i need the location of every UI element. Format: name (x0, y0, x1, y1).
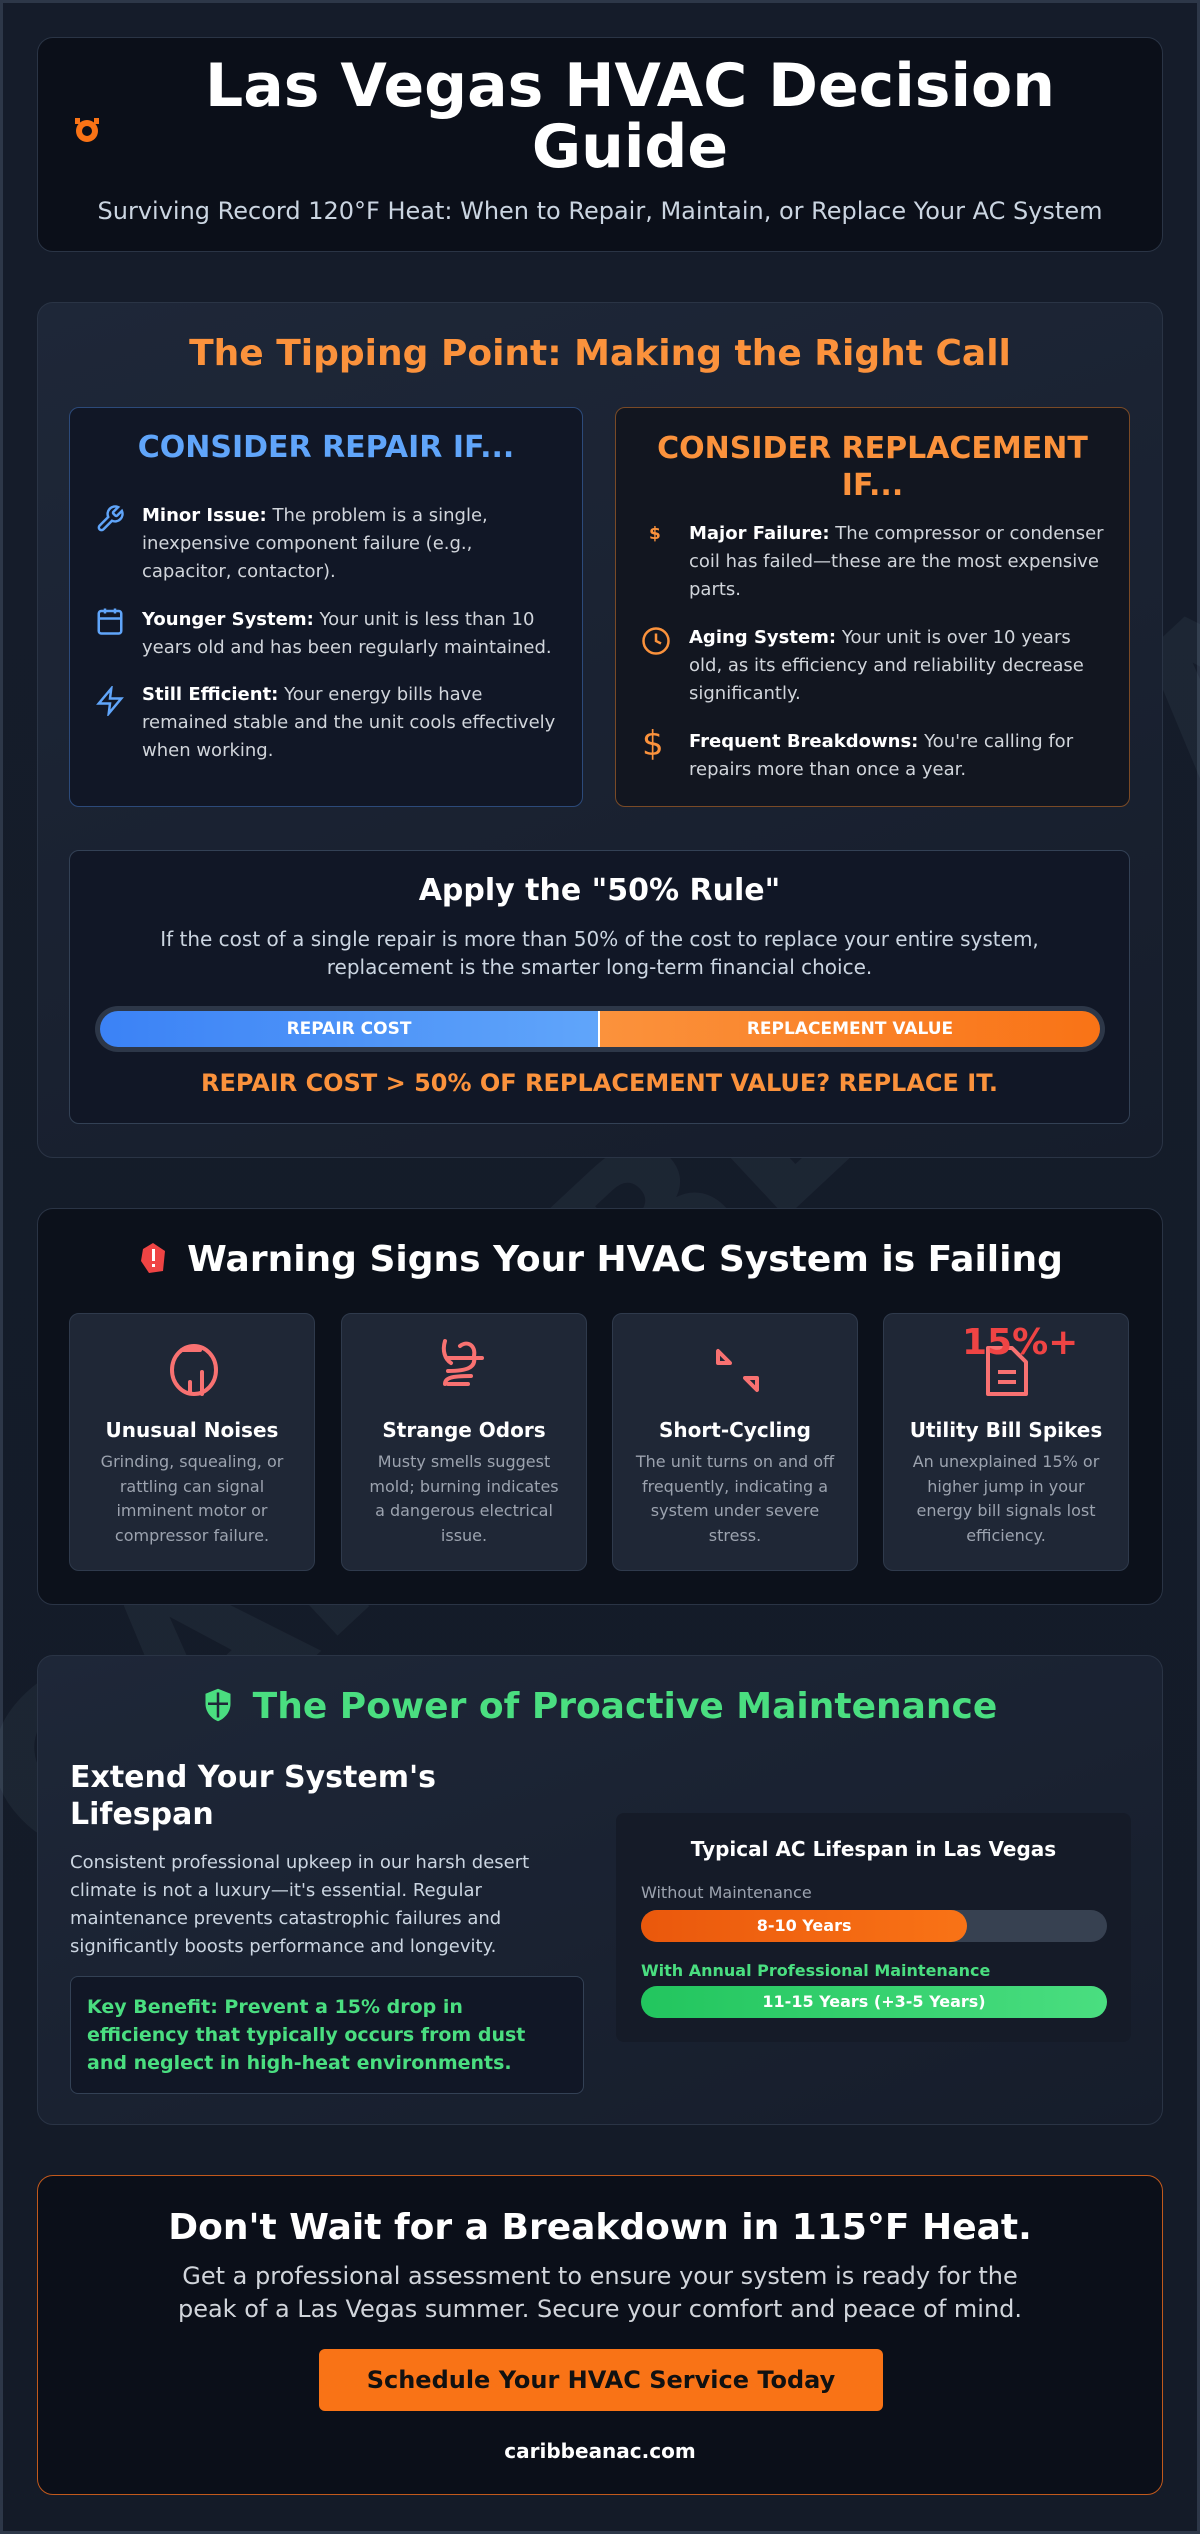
icon: clock (642, 627, 670, 655)
header panel (37, 37, 1163, 252)
key benefit callout (70, 1976, 584, 2094)
card: strange odors (341, 1313, 587, 1571)
card: short-cycling: The unit turns on and off frequently, indicating a system under severe stress. (636, 1452, 834, 1544)
rule conclusion: REPAIR COST > 50% OF REPLACEMENT VALUE? REPLACE IT. (201, 1069, 998, 1097)
bar with maintenance: 11-15 Years (+3-5 Years) (762, 1992, 986, 2011)
item aging system: Aging System: Your unit is over 10 years old, as its efficiency and reliability decrease significantly. (689, 627, 1084, 704)
cta text: Get a professional assessment to ensure your system is ready for the (182, 2262, 1018, 2290)
domain: caribbeanac.com (504, 2439, 696, 2463)
icon: calendar (98, 608, 122, 635)
card: utility bill spikes (883, 1313, 1129, 1571)
bar with maintenance (641, 1986, 1107, 2018)
cta button: Schedule Your HVAC Service Today (367, 2366, 835, 2394)
paragraph: Consistent professional upkeep in our harsh desert climate is not a luxury—it's essential. Regular maintenance prevents catastrophic failures and significantly boosts performance and longevity. (70, 1852, 529, 1957)
comparison bar: REPAIR COST (287, 1019, 411, 1039)
chart: lifespan: With Annual Professional Maintenance (641, 1961, 990, 1980)
panel: warning signs (37, 1208, 1163, 1605)
subheading lifespan: Extend Your System's (70, 1760, 436, 1795)
item minor issue: Minor Issue: The problem is a single, inexpensive component failure (e.g., capacitor, contactor). (142, 505, 488, 582)
card: unusual noises: Grinding, squealing, or rattling can signal imminent motor or compressor failure. (101, 1452, 283, 1544)
cta text: peak of a Las Vegas summer. Secure your comfort and peace of mind. (178, 2295, 1022, 2323)
item major failure: Major Failure: The compressor or condenser coil has failed—these are the most expensive parts. (689, 523, 1104, 600)
card: unusual noises (69, 1313, 315, 1571)
card: utility bill spikes: Utility Bill Spikes (910, 1418, 1102, 1442)
panel: consider repair (69, 407, 583, 807)
card: short-cycling: Short-Cycling (659, 1418, 811, 1442)
panel: 50% rule (69, 850, 1130, 1124)
icon: arrows (716, 1348, 759, 1392)
subtitle: Surviving Record 120°F Heat: When to Repair, Maintain, or Replace Your AC System (98, 197, 1102, 225)
comparison bar (95, 1006, 1105, 1052)
icon: bolt (96, 686, 124, 716)
card: strange odors: Musty smells suggest mold; burning indicates a dangerous electrical issue. (369, 1452, 559, 1544)
subheading lifespan (70, 1760, 436, 1832)
panel: consider replacement (615, 407, 1130, 807)
heading replacement: IF... (842, 468, 903, 503)
icon: wrench (98, 505, 124, 532)
item younger system: Younger System: Your unit is less than 10 years old and has been regularly maintained. (142, 609, 552, 658)
icon: small dollar: $ (649, 524, 661, 544)
card: unusual noises: Unusual Noises (106, 1418, 278, 1442)
heading replacement (657, 431, 1088, 503)
subheading lifespan: Lifespan (70, 1797, 214, 1832)
cta text (178, 2262, 1022, 2323)
rule text: If the cost of a single repair is more than 50% of the cost to replace your entire system, replacement is the smarter long-term financial choice. (160, 927, 1039, 979)
chart: lifespan: Typical AC Lifespan in Las Vegas (691, 1837, 1056, 1861)
bar without maintenance: 8-10 Years (757, 1916, 851, 1935)
title: Guide (532, 112, 728, 182)
icon: dollar: $ (642, 724, 664, 764)
item still efficient: Still Efficient: Your energy bills have remained stable and the unit cools effectively when working. (142, 684, 555, 761)
cta button (319, 2349, 883, 2411)
heading 50% rule: Apply the "50% Rule" (419, 873, 780, 908)
panel: tipping point (37, 302, 1163, 1158)
card: strange odors: Strange Odors (382, 1418, 546, 1442)
chart: lifespan (616, 1813, 1131, 2042)
card: utility bill spikes: An unexplained 15% or higher jump in your energy bill signals lost efficiency. (913, 1452, 1099, 1544)
comparison bar: REPLACEMENT VALUE (747, 1019, 953, 1039)
panel: call to action (37, 2175, 1163, 2495)
chart: lifespan: Without Maintenance (641, 1883, 812, 1902)
item frequent breakdowns: Frequent Breakdowns: You're calling for repairs more than once a year. (689, 731, 1073, 780)
icon: sun gear (75, 118, 99, 142)
icon: ear (170, 1344, 218, 1396)
title: Las Vegas HVAC Decision (205, 51, 1055, 121)
panel: maintenance (37, 1655, 1163, 2125)
key benefit callout: Key Benefit: Prevent a 15% drop in efficiency that typically occurs from dust and neglect in high-heat environments. (87, 1996, 525, 2074)
cta heading: Don't Wait for a Breakdown in 115°F Heat. (168, 2207, 1032, 2248)
heading: The Tipping Point: Making the Right Call (189, 333, 1011, 374)
heading repair: CONSIDER REPAIR IF... (138, 430, 514, 465)
heading maintenance: The Power of Proactive Maintenance (253, 1686, 997, 1727)
stat 15%+: 15%+ (962, 1322, 1078, 1363)
heading replacement: CONSIDER REPLACEMENT (657, 431, 1088, 466)
bar without maintenance (641, 1910, 1107, 1942)
icon: wind (442, 1339, 484, 1386)
title (205, 51, 1055, 182)
card: short-cycling (612, 1313, 858, 1571)
heading warning: Warning Signs Your HVAC System is Failing (187, 1239, 1063, 1280)
icon: bill (986, 1346, 1028, 1396)
